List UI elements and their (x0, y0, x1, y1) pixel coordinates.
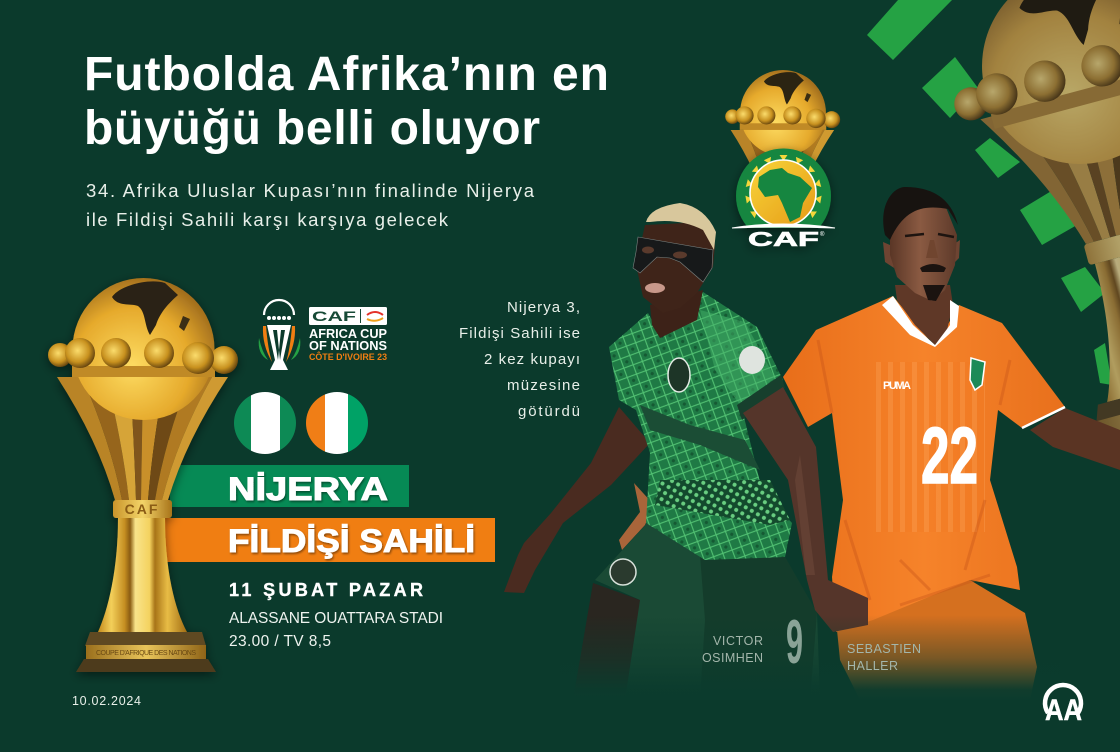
banner label: Fildişi Sahili: FİLDİŞİ SAHİLİ (228, 523, 475, 559)
caption: Victor Osimhen: VICTOR (713, 634, 763, 648)
nose shade (926, 240, 938, 258)
shorts shadow (700, 555, 817, 700)
neck (650, 290, 703, 338)
jersey dots panel (655, 480, 790, 525)
left trophy: CAF (125, 501, 159, 517)
caption: Sebastien Haller: HALLER (847, 659, 898, 673)
AFCON logo: OF NATIONS (309, 338, 387, 353)
banner label: Nijerya: NİJERYA (228, 471, 388, 507)
caption: Victor Osimhen (702, 634, 763, 665)
mouth (645, 283, 665, 293)
player: Sebastien Haller (783, 187, 1120, 700)
shirt number 22: 22 (921, 411, 978, 500)
jersey (609, 292, 792, 560)
eyes (642, 246, 654, 254)
title: Futbolda Afrika’nın en (84, 48, 609, 101)
hair (883, 187, 958, 240)
left trophy (48, 278, 238, 672)
AA logo: AA (1045, 694, 1082, 727)
fade over player legs (560, 615, 1060, 700)
caption: Sebastien Haller (847, 642, 921, 673)
head (890, 200, 957, 301)
text: 9 (786, 608, 803, 677)
sleeve cuff (737, 375, 785, 420)
jersey dark panel (640, 405, 760, 470)
AFCON logo: AFRICA CUP (309, 326, 387, 341)
sleeve patch (739, 346, 765, 374)
side note: 2 kez kupayı (484, 351, 580, 368)
CAF logo: ® (820, 231, 825, 238)
neck (895, 285, 953, 345)
face mask (633, 237, 713, 282)
jersey folds (818, 340, 1010, 605)
subtitle (86, 180, 535, 230)
side note: Nijerya 3, (507, 299, 580, 316)
cuff (1022, 407, 1065, 428)
flag: Nigeria (234, 392, 296, 454)
moustache and goatee (920, 264, 946, 301)
AFCON logo: CAF (312, 308, 357, 324)
side note (459, 299, 580, 420)
match details: 11 ŞUBAT PAZAR (229, 580, 423, 600)
hair (646, 203, 716, 250)
left arm (504, 407, 650, 593)
CAF logo (732, 148, 835, 251)
jersey badge (970, 358, 985, 390)
player: Victor Osimhen (504, 203, 868, 700)
ears (883, 240, 960, 268)
small trophy (725, 70, 840, 163)
title (84, 48, 609, 155)
caption: Sebastien Haller: SEBASTIEN (847, 642, 921, 656)
match details (229, 580, 443, 650)
title: büyüğü belli oluyor (84, 102, 540, 155)
puma logo: PUMA (883, 380, 911, 392)
AFCON logo: CÔTE D'IVOIRE 23 (309, 351, 387, 363)
collar (882, 296, 959, 347)
AFCON logo (259, 300, 387, 370)
right arm (743, 387, 868, 632)
AA logo (1045, 685, 1082, 727)
extended arm (1030, 408, 1120, 470)
shorts (595, 522, 820, 700)
side note: müzesine (507, 377, 580, 394)
rear hand (619, 483, 654, 550)
big dim trophy, top right (927, 0, 1120, 461)
decorative green tape pieces (867, 0, 1112, 385)
CAF logo: CAF (748, 229, 819, 251)
shorts crest (610, 559, 636, 585)
date: 10.02.2024 (72, 694, 141, 708)
eyes and brows (905, 234, 954, 237)
side note: götürdü (518, 403, 580, 420)
subtitle: 34. Afrika Uluslar Kupası’nın finalinde Nijerya (86, 180, 535, 201)
jersey (783, 296, 1065, 632)
subtitle: ile Fildişi Sahili karşı karşıya gelecek (86, 209, 449, 230)
caption: Victor Osimhen: OSIMHEN (702, 651, 763, 665)
match details: ALASSANE OUATTARA STADI (229, 610, 443, 627)
jersey crest (668, 358, 690, 392)
shorts (836, 580, 1037, 700)
left trophy: COUPE D'AFRIQUE DES NATIONS (96, 650, 196, 657)
side note: Fildişi Sahili ise (459, 325, 580, 342)
head (636, 222, 715, 313)
jersey stripes (875, 362, 985, 532)
team banners (165, 465, 495, 562)
flag: Ivory Coast (306, 392, 369, 454)
arm highlight (795, 455, 815, 575)
bright shoulder (700, 310, 775, 405)
match details: 23.00 / TV 8,5 (229, 633, 331, 650)
left leg (573, 583, 640, 700)
